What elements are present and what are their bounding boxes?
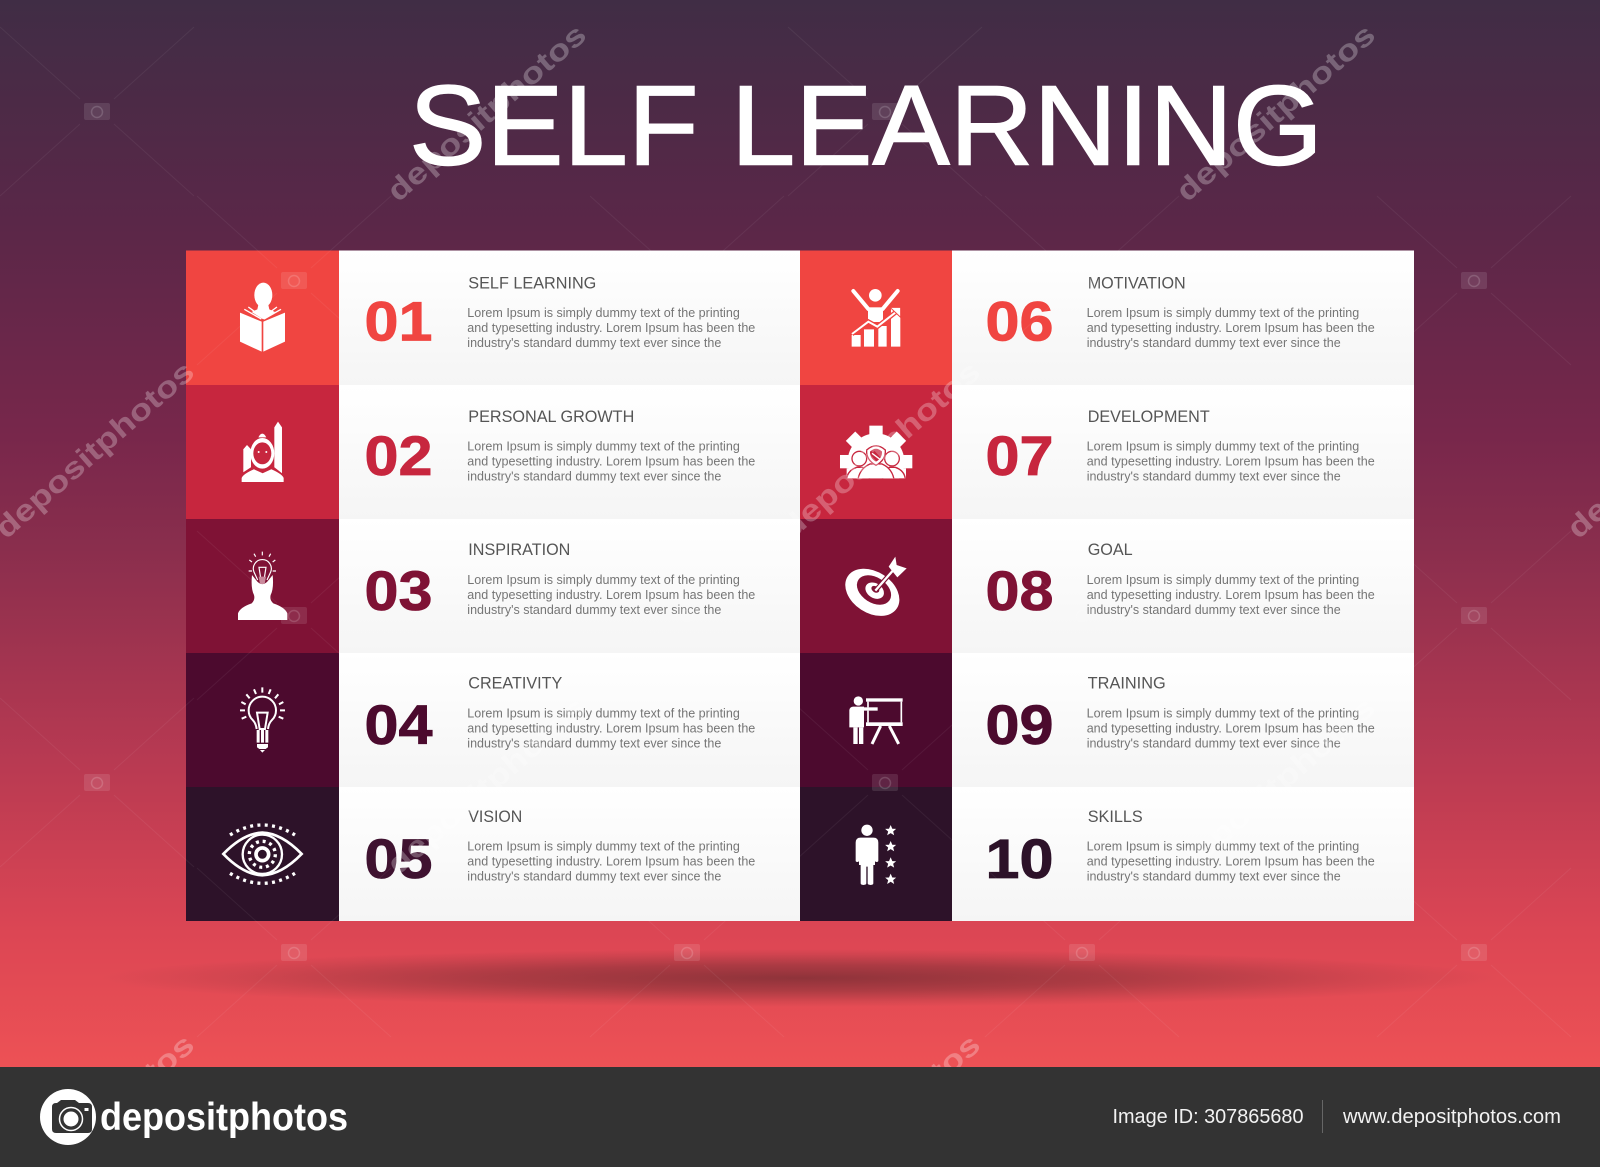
panel: 07 development	[800, 385, 1414, 519]
body text	[467, 706, 755, 750]
watermark text: depositphotos	[381, 18, 593, 208]
heading: DEVELOPMENT	[1088, 408, 1210, 426]
body text: industry's standard dummy text ever since the	[1087, 870, 1341, 884]
body text: and typesetting industry. Lorem Ipsum has been the	[467, 855, 755, 869]
body text: industry's standard dummy text ever since the	[467, 470, 721, 484]
number 10: 10	[986, 827, 1054, 890]
body text: and typesetting industry. Lorem Ipsum has been the	[1087, 321, 1375, 335]
icon: person with stars	[856, 825, 896, 885]
watermark text: depositphotos	[775, 355, 987, 545]
panel: 06 motivation	[800, 250, 1414, 385]
heading: VISION	[468, 808, 522, 826]
panel: 05 vision	[186, 787, 800, 921]
body text: Lorem Ipsum is simply dummy text of the printing	[1087, 840, 1359, 854]
body text: industry's standard dummy text ever since the	[467, 870, 721, 884]
body text: Lorem Ipsum is simply dummy text of the printing	[467, 573, 740, 587]
panel: 01 self learning	[186, 250, 800, 385]
body text: Lorem Ipsum is simply dummy text of the printing	[1087, 306, 1359, 320]
body text	[1087, 306, 1375, 350]
logo wordmark: depositphotos	[100, 1096, 348, 1139]
body text: and typesetting industry. Lorem Ipsum has been the	[467, 588, 755, 602]
icon: team with gear	[840, 426, 912, 478]
body text: Lorem Ipsum is simply dummy text of the printing	[467, 706, 740, 720]
image id: Image ID: 307865680	[1112, 1106, 1304, 1128]
body text	[467, 440, 755, 484]
title: SELF LEARNING	[409, 62, 1323, 188]
body text: Lorem Ipsum is simply dummy text of the printing	[467, 440, 740, 454]
heading: SKILLS	[1088, 808, 1143, 826]
body text: Lorem Ipsum is simply dummy text of the printing	[467, 840, 740, 854]
body text: and typesetting industry. Lorem Ipsum has been the	[467, 455, 755, 469]
body text	[467, 306, 755, 350]
floor shadow under table	[100, 949, 1500, 1007]
website url: www.depositphotos.com	[1342, 1106, 1561, 1128]
body text: industry's standard dummy text ever since the	[1087, 470, 1341, 484]
heading: PERSONAL GROWTH	[468, 408, 634, 426]
body text	[1087, 440, 1375, 484]
icon: trainer at board	[849, 696, 903, 744]
body text: Lorem Ipsum is simply dummy text of the printing	[1087, 573, 1359, 587]
panel: 10 skills	[800, 787, 1414, 921]
watermark text: depositphotos	[1170, 18, 1382, 208]
icon: target with arrow	[836, 557, 908, 626]
body text: Lorem Ipsum is simply dummy text of the printing	[1087, 706, 1359, 720]
icon: pencil light bulb	[240, 687, 285, 753]
body text: industry's standard dummy text ever since the	[467, 736, 721, 750]
icon: person on growth chart	[852, 289, 901, 347]
heading: CREATIVITY	[468, 674, 562, 692]
icon: person with growth bars	[242, 422, 284, 482]
number 03: 03	[364, 559, 432, 622]
icon: person reading book	[240, 283, 285, 352]
body text: and typesetting industry. Lorem Ipsum has been the	[1087, 721, 1375, 735]
body text	[467, 840, 755, 884]
body text	[1087, 573, 1375, 617]
body text: industry's standard dummy text ever since the	[467, 603, 721, 617]
number 07: 07	[986, 424, 1054, 487]
icon: depositphotos camera logo	[40, 1089, 96, 1145]
body text: industry's standard dummy text ever since the	[1087, 736, 1341, 750]
heading: SELF LEARNING	[468, 275, 596, 293]
panel: 09 training	[800, 653, 1414, 787]
heading: TRAINING	[1088, 674, 1166, 692]
body text: and typesetting industry. Lorem Ipsum has been the	[1087, 455, 1375, 469]
number 02: 02	[364, 424, 432, 487]
body text	[1087, 840, 1375, 884]
footer band	[0, 1067, 1600, 1167]
body text: industry's standard dummy text ever since the	[467, 336, 721, 350]
number 04: 04	[364, 693, 432, 756]
icon: eye	[223, 825, 302, 883]
number 05: 05	[364, 827, 432, 890]
panel: 02 personal growth	[186, 385, 800, 519]
heading: GOAL	[1088, 541, 1133, 559]
body text	[467, 573, 755, 617]
body text: and typesetting industry. Lorem Ipsum has been the	[1087, 588, 1375, 602]
body text: and typesetting industry. Lorem Ipsum has been the	[1087, 855, 1375, 869]
number 08: 08	[986, 559, 1054, 622]
watermark text: depositphotos	[381, 691, 593, 881]
body text: and typesetting industry. Lorem Ipsum has been the	[467, 721, 755, 735]
body text: Lorem Ipsum is simply dummy text of the printing	[467, 306, 740, 320]
panel: 03 inspiration	[186, 519, 800, 653]
panel: 08 goal	[800, 519, 1414, 653]
watermark text: depositphotos	[1170, 691, 1382, 881]
number 01: 01	[364, 290, 432, 352]
body text: industry's standard dummy text ever since the	[1087, 336, 1341, 350]
heading: INSPIRATION	[468, 541, 570, 559]
panel: 04 creativity	[186, 653, 800, 787]
body text: and typesetting industry. Lorem Ipsum has been the	[467, 321, 755, 335]
body text: Lorem Ipsum is simply dummy text of the printing	[1087, 440, 1359, 454]
number 06: 06	[986, 290, 1054, 352]
icon: head with light bulb	[238, 552, 287, 620]
body text: industry's standard dummy text ever since the	[1087, 603, 1341, 617]
number 09: 09	[986, 693, 1054, 756]
body text	[1087, 706, 1375, 750]
heading: MOTIVATION	[1088, 275, 1186, 293]
